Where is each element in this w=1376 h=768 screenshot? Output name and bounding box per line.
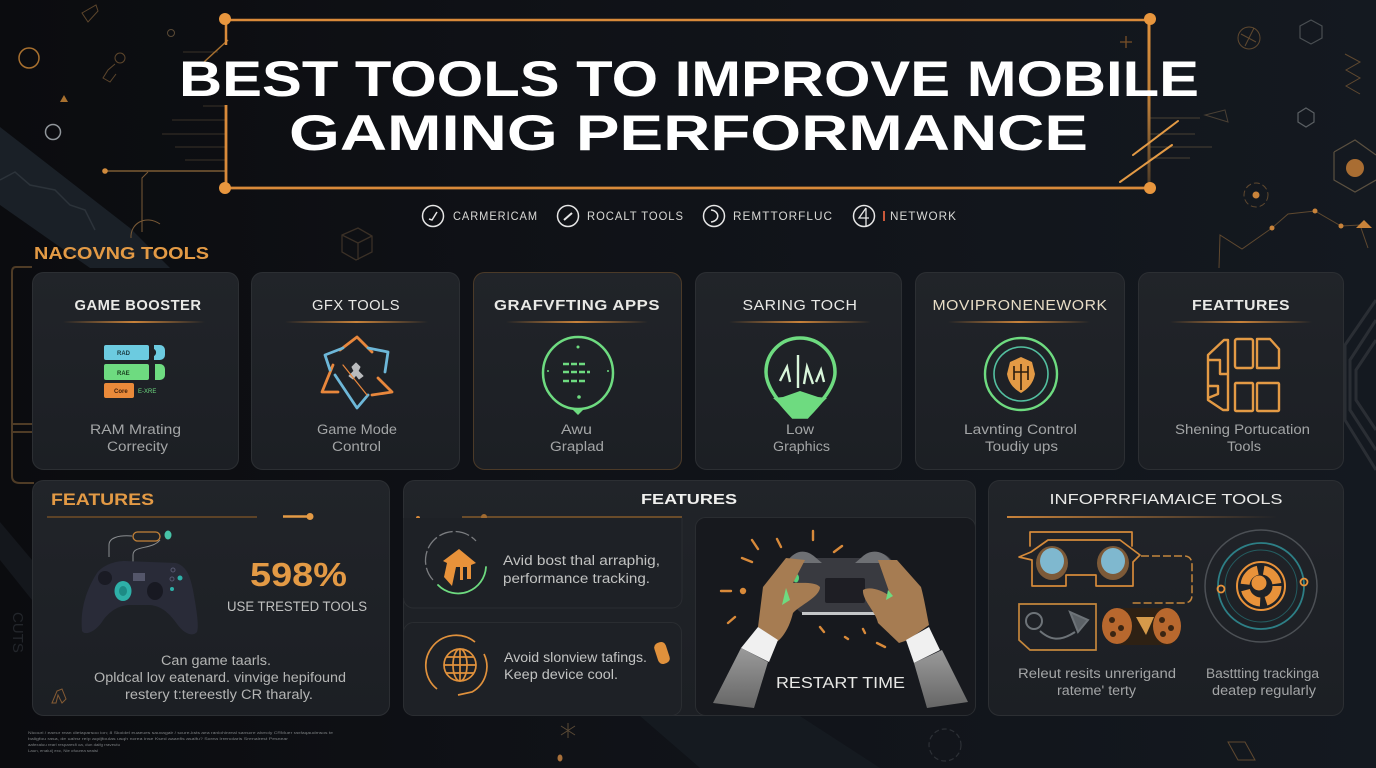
text [503, 553, 660, 586]
stat: percentage: 598% [250, 556, 347, 593]
icon: small phone [653, 641, 671, 665]
heading: SARING TOCH [742, 297, 858, 314]
heading: FEATTURES [1192, 297, 1290, 314]
caption [773, 422, 830, 454]
legend item: remtorfluc [704, 206, 833, 226]
icon: VR goggles [1019, 532, 1192, 603]
description [94, 653, 346, 702]
icon: triangle arcs [322, 337, 392, 408]
title [179, 51, 1199, 161]
icon: green location pin with waveform [766, 338, 835, 418]
title: GAMING PERFORMANCE [289, 105, 1088, 161]
sub-panel: tracking tip [404, 518, 682, 608]
stat label: USE TRESTED TOOLS [227, 599, 367, 614]
icon: radial gauge [1205, 530, 1317, 642]
legend item: rocalt tools: ROCALT TOOLS [587, 211, 684, 223]
caption: Graphics [773, 439, 830, 454]
caption: Tools [1227, 439, 1261, 454]
left cuff and sleeve [741, 627, 778, 662]
icon: stacked bars: E-XRE [138, 389, 156, 395]
icon: stacked bars: Core [114, 389, 128, 395]
panel: game booster [32, 272, 238, 470]
left hand [758, 558, 820, 641]
icon: shield in rings [985, 338, 1057, 410]
fine print [28, 731, 333, 753]
caption right [1206, 666, 1319, 698]
caption: Shening Portucation [1175, 422, 1310, 437]
panel: gfx tools [252, 272, 460, 470]
fine print: aafexaluu rearl resparesfi oa, dun daifg rraveutu [28, 743, 120, 747]
text: Avoid slonview tafings. [504, 650, 647, 665]
legend item: camera [422, 206, 538, 226]
background diagonal bands and circuit decoration: CUTS [9, 612, 26, 653]
caption: Game Mode [317, 422, 397, 437]
icon: small glyph [52, 689, 66, 703]
caption: Awu [561, 422, 592, 437]
panel: features centre [404, 480, 976, 716]
caption [550, 422, 604, 454]
legend item: network: NETWORK [890, 211, 957, 223]
panel: features small [1138, 272, 1344, 470]
sparks [721, 531, 885, 647]
legend item: rocalt tools [558, 206, 684, 226]
caption: Low [786, 422, 814, 437]
caption: RAM Mrating [90, 422, 181, 437]
caption left: Releut resits unrerigand [1018, 666, 1176, 681]
caption: Toudiy ups [985, 439, 1058, 454]
heading: INFOPRRFIAMAICE TOOLS [1050, 491, 1282, 508]
heading: FEATURES [641, 491, 737, 508]
caption [90, 422, 181, 454]
caption: Lavnting Control [964, 422, 1077, 437]
caption: Correcity [107, 439, 168, 454]
caption: Control [332, 439, 381, 454]
icon: ring with building [425, 531, 486, 593]
icon: orange block outline [1208, 339, 1279, 411]
heading: GAME BOOSTER [74, 297, 202, 314]
caption [964, 422, 1077, 454]
caption: Graplad [550, 439, 604, 454]
description: restery t:tereestly CR tharaly. [125, 687, 313, 702]
sub-panel: restart time illustration [696, 518, 976, 716]
panel: saring toch [696, 272, 902, 470]
description: Can game taarls. [161, 653, 271, 668]
category legend row [422, 206, 957, 226]
fine print: Laun, enalui( exc, Nie ofuurea seaisl [28, 749, 98, 753]
icon: green dial [543, 337, 613, 415]
caption right: deatep regularly [1212, 683, 1316, 698]
legend item: remtorfluc: REMTTORFLUC [733, 211, 833, 223]
legend item: camera: CARMERICAM [453, 211, 538, 223]
description: Opldcal lov eatenard. vinvige hepifound [94, 670, 346, 685]
icon: gamepad outline [1019, 604, 1096, 650]
icon: stacked bars: RAE [117, 371, 130, 377]
text: Avid bost thal arraphig, [503, 553, 660, 568]
caption right: Basttting trackinga [1206, 666, 1319, 681]
panel: performance tools [988, 480, 1344, 716]
legend item: network [854, 206, 957, 226]
icon: orange gears [1102, 608, 1181, 645]
fine print: baligfou rasa, de uahsr reip aqdjfoulas usqh ncrea inse Ksed aaanfis asalfu? Sorea Irrenolaris Srenalrest Pesnear [28, 737, 289, 741]
panel: moviprone network [916, 272, 1124, 470]
right cuff and sleeve [906, 627, 940, 663]
right hand [863, 560, 929, 643]
icon: game controller [82, 530, 198, 634]
label: RESTART TIME [776, 675, 905, 692]
heading: MOVIPRONENEWORK [932, 297, 1108, 314]
text [504, 650, 647, 682]
gamepad [785, 552, 898, 613]
heading: GRAFVFTING APPS [494, 297, 660, 314]
title: BEST TOOLS TO IMPROVE MOBILE [179, 51, 1199, 107]
sub-panel: keep device cool [404, 622, 682, 716]
title frame [219, 13, 1178, 194]
panel: graphing apps [474, 272, 682, 470]
fine print: Nicouri / eaeur rean dietaparsoo ion; 8 Skoidel euaeues sauvagalr / scure-ksts aea ranlohinreal sanscre alveoly CRMuer raxfaqaudmsos te [28, 731, 333, 735]
caption left: rateme' terty [1057, 683, 1136, 698]
heading: GFX TOOLS [312, 297, 400, 314]
caption left [1018, 666, 1176, 698]
icon: stacked bars [104, 345, 165, 398]
section heading: NACOVNG TOOLS [34, 243, 209, 263]
caption [1175, 422, 1310, 454]
icon: stacked bars: RAD [117, 351, 131, 357]
icon: globe in ring [426, 635, 487, 695]
panel: features stats [32, 480, 390, 716]
text: Keep device cool. [504, 667, 618, 682]
heading: FEATURES [51, 490, 154, 509]
caption [317, 422, 397, 454]
text: performance tracking. [503, 571, 650, 586]
